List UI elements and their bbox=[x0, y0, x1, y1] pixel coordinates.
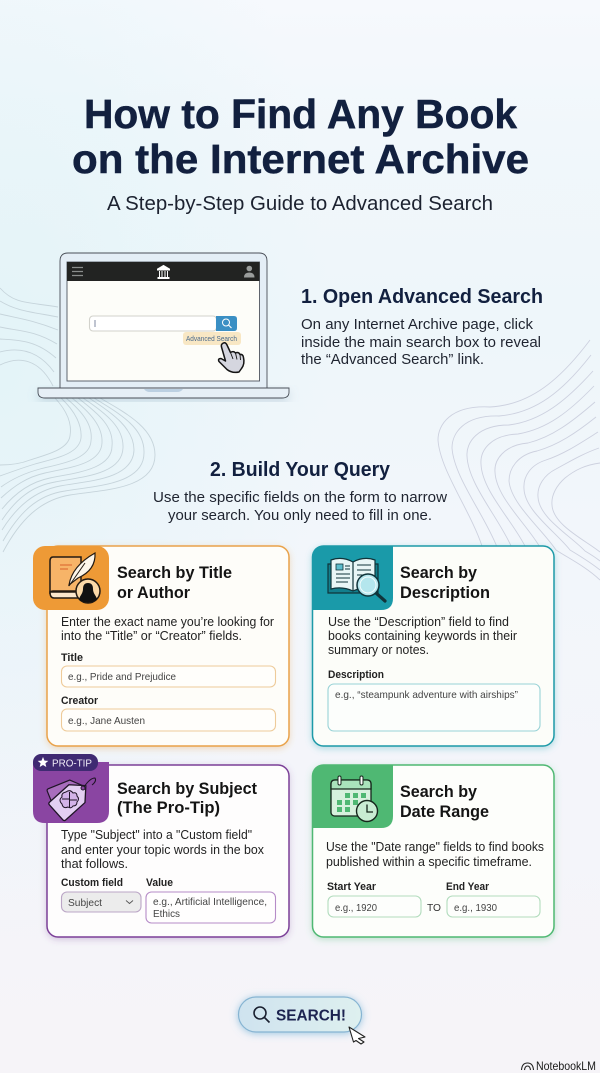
icon: logo arcs bbox=[522, 1063, 534, 1070]
card heading bbox=[400, 782, 489, 821]
step 2 text: 2. Build Your Query bbox=[210, 459, 391, 481]
pro-tip badge bbox=[33, 754, 98, 771]
card heading: (The Pro-Tip) bbox=[117, 798, 220, 817]
card heading: or Author bbox=[117, 583, 190, 602]
panel: search by subject bbox=[33, 754, 289, 937]
icon: hand cursor bbox=[219, 343, 244, 372]
site header bar bbox=[67, 262, 260, 281]
field: creator bbox=[61, 695, 276, 731]
step 1 text bbox=[301, 286, 543, 368]
step 1 text: On any Internet Archive page, click bbox=[301, 317, 534, 333]
description bbox=[61, 827, 264, 871]
pro-tip badge: PRO-TIP bbox=[52, 758, 92, 770]
icon: book, quill and author bbox=[33, 546, 109, 610]
card heading: Search by Subject bbox=[117, 779, 257, 798]
field: value: e.g., Artificial Intelligence, bbox=[153, 896, 267, 908]
icon: magnifier bbox=[254, 1007, 270, 1022]
step 2 text bbox=[153, 459, 448, 524]
step 1 text: inside the main search box to reveal bbox=[301, 335, 541, 351]
description bbox=[61, 614, 275, 643]
field: description bbox=[328, 669, 540, 731]
field: creator: Creator bbox=[61, 695, 99, 707]
title: on the Internet Archive bbox=[72, 136, 529, 182]
laptop body bbox=[38, 253, 289, 398]
title bbox=[72, 91, 529, 182]
description: Type "Subject" into a "Custom field" bbox=[61, 827, 252, 842]
description: books containing keywords in their bbox=[328, 628, 518, 643]
description: summary or notes. bbox=[328, 642, 429, 657]
title: How to Find Any Book bbox=[84, 91, 517, 137]
icon: calendar and clock bbox=[312, 765, 393, 828]
icon: subject tag with brain bbox=[33, 762, 109, 823]
field: start year: e.g., 1920 bbox=[335, 902, 377, 914]
field: end year: End Year bbox=[446, 881, 490, 893]
card heading: Search by Title bbox=[117, 563, 232, 582]
search input bbox=[90, 316, 237, 331]
step 2 text: Use the specific fields on the form to narrow bbox=[153, 490, 448, 506]
field: creator: e.g., Jane Austen bbox=[68, 715, 145, 727]
panel: search by description bbox=[312, 546, 554, 746]
field: custom field dropdown bbox=[61, 877, 141, 912]
field: title bbox=[61, 652, 276, 687]
field: start year bbox=[327, 881, 421, 917]
search button: SEARCH! bbox=[276, 1008, 346, 1024]
field: value: Ethics bbox=[153, 908, 180, 920]
field: end year: e.g., 1930 bbox=[454, 902, 497, 914]
card heading: Search by bbox=[400, 563, 478, 582]
advanced search tooltip bbox=[183, 332, 241, 345]
field: value bbox=[146, 877, 276, 923]
field: start year: Start Year bbox=[327, 881, 377, 893]
field: value: Value bbox=[146, 877, 173, 889]
card heading: Description bbox=[400, 583, 490, 602]
description bbox=[326, 839, 544, 869]
description: published within a specific timeframe. bbox=[326, 854, 532, 869]
description: Use the "Date range" fields to find books bbox=[326, 839, 544, 854]
description: and enter your topic words in the box bbox=[61, 842, 264, 857]
description bbox=[328, 614, 518, 657]
field: description: e.g., “steampunk adventure with airships” bbox=[335, 689, 518, 701]
description: Use the “Description” field to find bbox=[328, 614, 509, 629]
advanced search tooltip: Advanced Search bbox=[186, 334, 237, 343]
subtitle: A Step-by-Step Guide to Advanced Search bbox=[107, 193, 493, 215]
description: that follows. bbox=[61, 856, 128, 871]
field: description: Description bbox=[328, 669, 384, 681]
description: Enter the exact name you’re looking for bbox=[61, 614, 275, 629]
field: title: e.g., Pride and Prejudice bbox=[68, 671, 176, 683]
step 2 text: your search. You only need to fill in one. bbox=[168, 508, 432, 524]
field: title: Title bbox=[61, 652, 83, 664]
card heading: Date Range bbox=[400, 802, 489, 821]
search button bbox=[238, 997, 362, 1032]
range separator: TO bbox=[427, 903, 441, 914]
field: end year bbox=[446, 881, 540, 917]
card heading bbox=[117, 779, 257, 817]
panel: search by date range bbox=[312, 765, 554, 937]
field: custom field dropdown: Subject bbox=[68, 897, 102, 909]
card heading bbox=[117, 563, 232, 602]
illustration: laptop with search box bbox=[38, 253, 289, 398]
description: into the “Title” or “Creator” fields. bbox=[61, 628, 242, 643]
field: custom field dropdown: Custom field bbox=[61, 877, 123, 889]
step 1 text: 1. Open Advanced Search bbox=[301, 286, 543, 308]
card heading: Search by bbox=[400, 782, 478, 801]
icon: open book and magnifier bbox=[312, 546, 393, 610]
panel: search by title or author bbox=[33, 546, 289, 746]
icon: arrow cursor bbox=[349, 1027, 365, 1044]
step 1 text: the “Advanced Search” link. bbox=[301, 352, 484, 368]
card heading bbox=[400, 563, 490, 602]
